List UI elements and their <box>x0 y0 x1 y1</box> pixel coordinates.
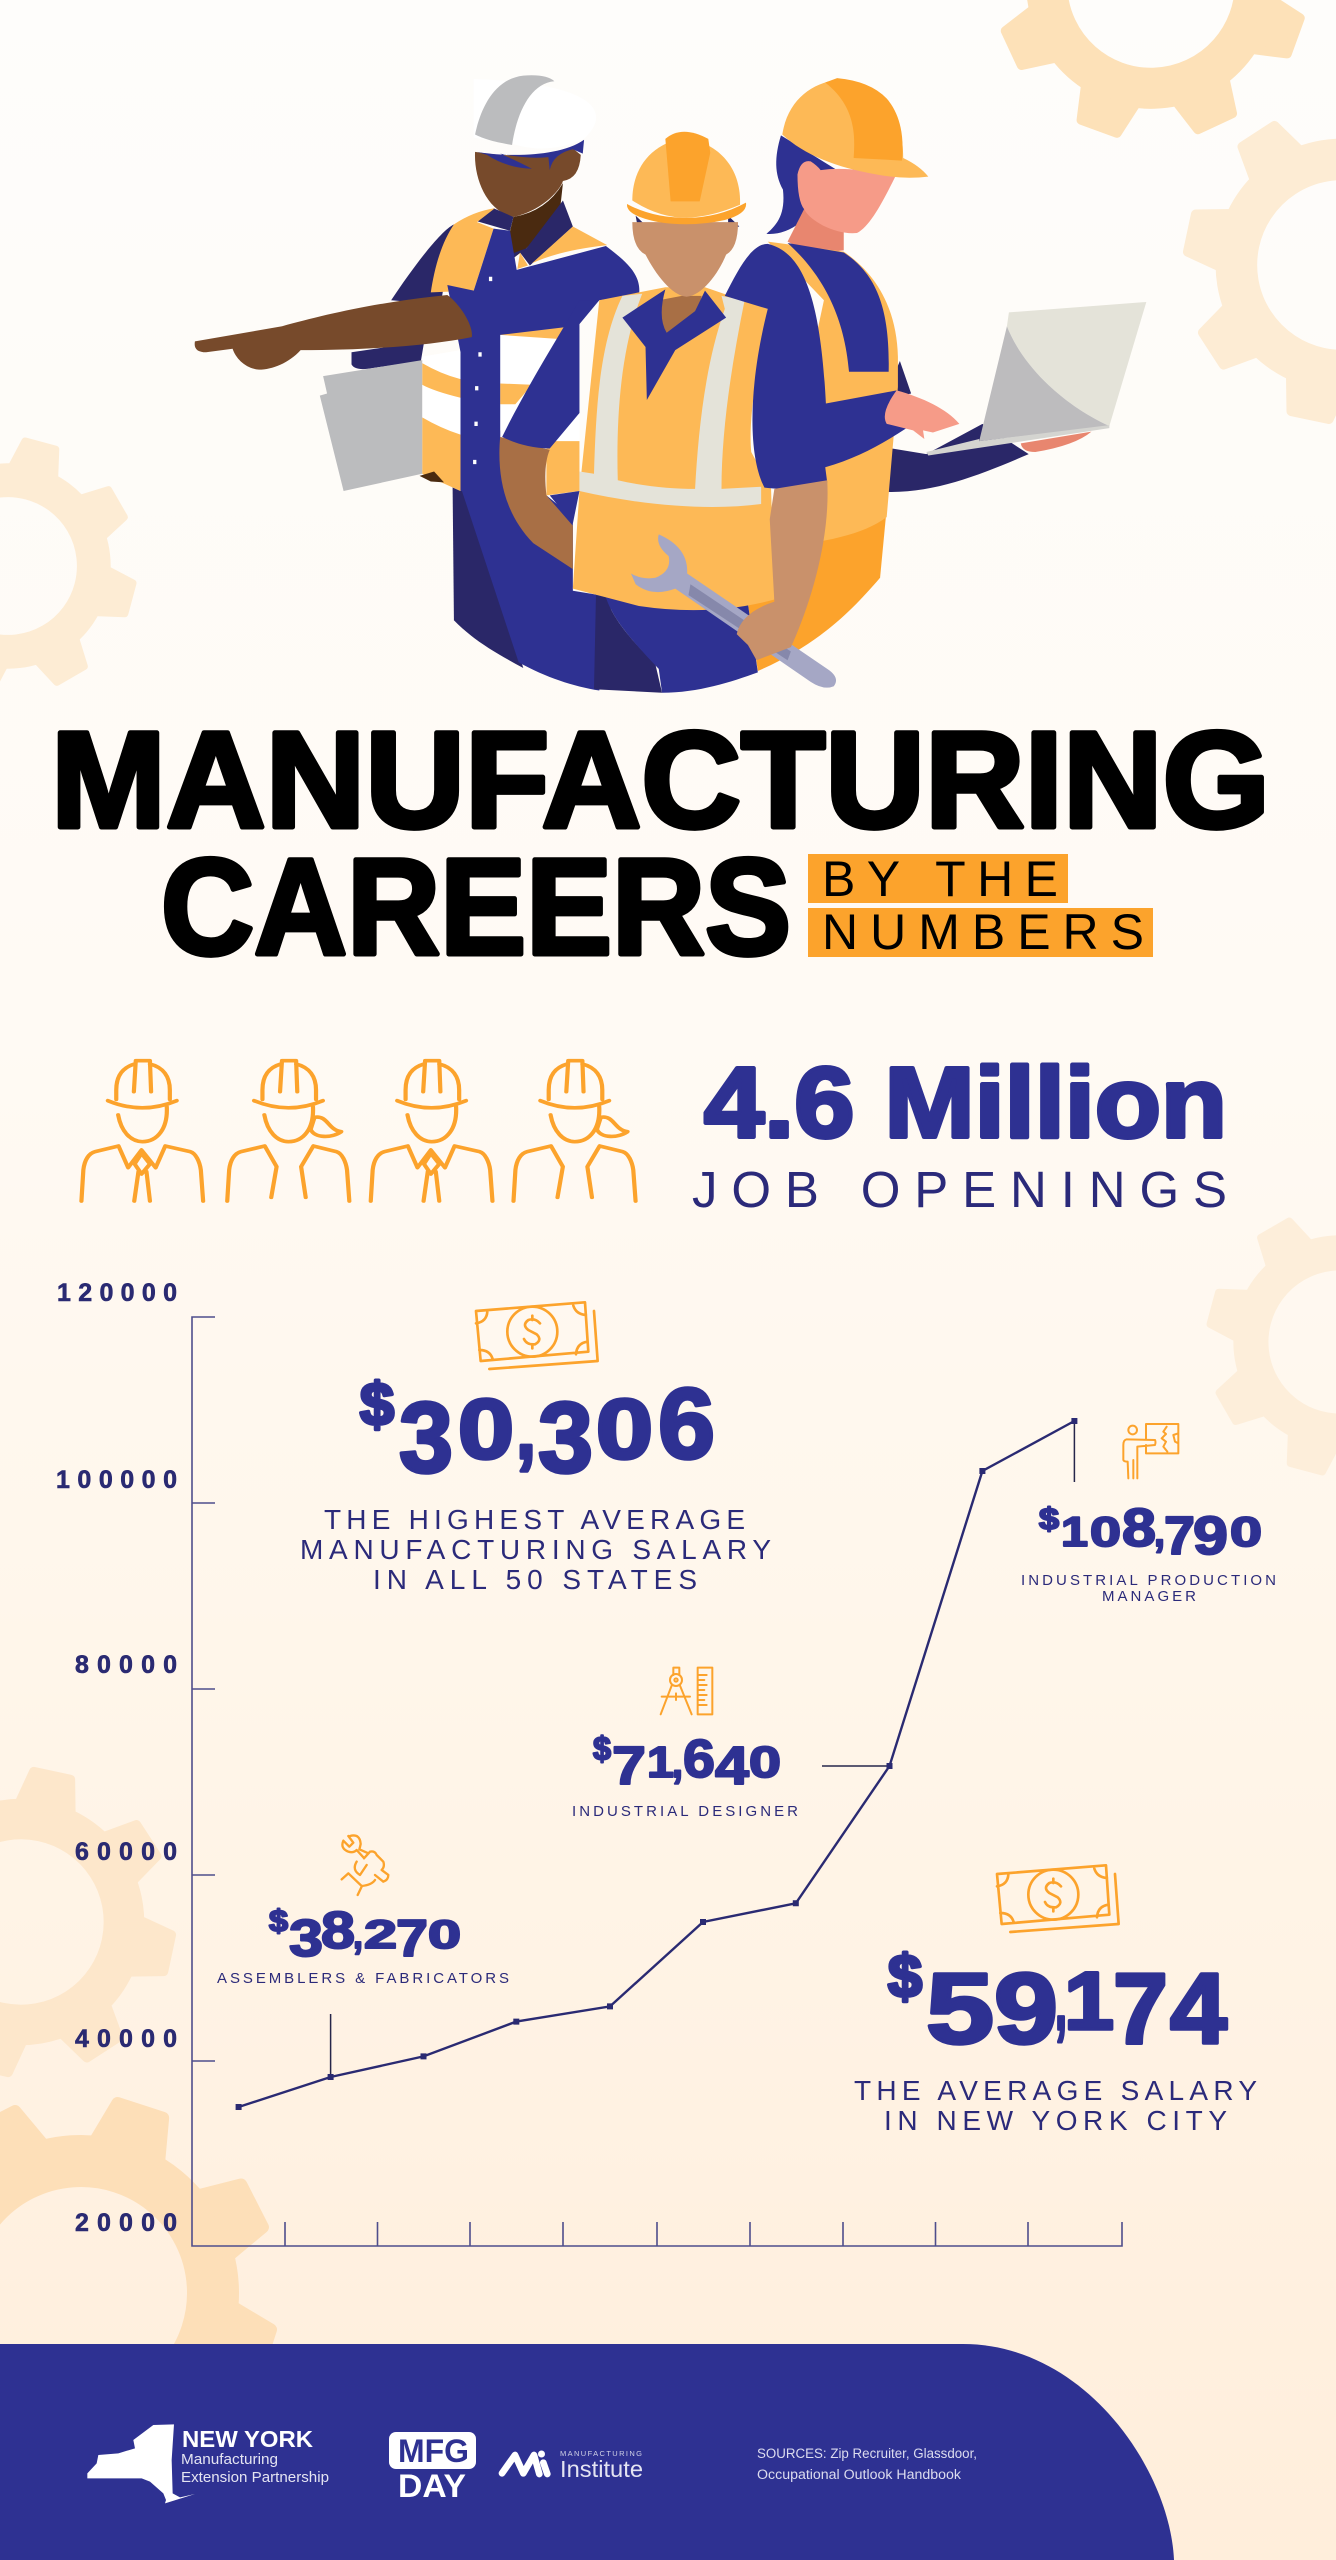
caption: average salary nyc: THE AVERAGE SALARY <box>854 2075 1257 2106</box>
stat: 38,270: 3 <box>289 1910 323 1968</box>
stat: 59,174: 1 <box>1064 1956 1114 2047</box>
y axis labels: 60000 <box>75 1838 177 1866</box>
gear: left upper <box>0 413 161 719</box>
logo: manufacturing institute <box>502 2449 643 2482</box>
stat: 30,306: , <box>516 1382 536 1476</box>
caption: highest average salary: MANUFACTURING SALARY <box>300 1534 771 1565</box>
stat: 71,640: 6 <box>683 1729 715 1789</box>
tag: numbers: NUMBERS <box>822 904 1144 960</box>
stat: 30,306: 6 <box>658 1368 715 1480</box>
logo: mfg day: MFG <box>398 2433 469 2469</box>
stat: 59,174: 9 <box>994 1953 1058 2065</box>
logo: mfg day: DAY <box>398 2468 466 2504</box>
stat: 108,790: , <box>1154 1508 1165 1555</box>
stat: 30,306: 3 <box>538 1382 593 1494</box>
logo: manufacturing institute: MANUFACTURING <box>560 2449 642 2458</box>
illustration: three workers <box>195 75 1146 693</box>
stat: 59,174: $ <box>888 1943 922 2010</box>
caption: industrial designer: INDUSTRIAL DESIGNER <box>572 1803 798 1820</box>
icon: man worker <box>371 1061 492 1201</box>
stat: 38,270: $ <box>269 1903 288 1938</box>
leader lines <box>331 1421 1074 2077</box>
stat: 38,270: 2 <box>364 1913 397 1957</box>
salary line <box>239 1421 1074 2107</box>
gear: left lower <box>0 1744 199 2100</box>
stat: 38,270: , <box>353 1913 363 1957</box>
tag: by the: BY THE <box>822 851 1058 907</box>
map: new york state <box>87 2424 195 2503</box>
y axis labels <box>56 1279 177 2237</box>
icons: four workers <box>81 1061 636 1201</box>
line chart <box>56 1279 1122 2246</box>
stat: 4.6 million: 4.6 Million <box>704 1047 1227 1159</box>
worker: centre, with wrench <box>499 132 959 693</box>
stat: 30,306: 0 <box>458 1382 514 1476</box>
caption: industrial production manager <box>1021 1572 1276 1605</box>
sources <box>757 2446 977 2482</box>
caption: industrial production manager: MANAGER <box>1102 1588 1196 1605</box>
stat: 71,640: , <box>672 1738 683 1787</box>
stat: 59,174: 4 <box>1170 1953 1227 2065</box>
icon: hand with wrench <box>342 1835 388 1895</box>
icon: presenter with board <box>1123 1424 1178 1478</box>
caption: highest average salary: IN ALL 50 STATES <box>373 1564 697 1595</box>
data points <box>236 1418 1077 2110</box>
stat: 38,270: 7 <box>396 1910 428 1968</box>
caption: average salary nyc: IN NEW YORK CITY <box>884 2105 1227 2136</box>
worker: right, with laptop <box>748 78 1146 671</box>
stat: 71,640: 4 <box>715 1736 749 1796</box>
stat: 59,174: 5 <box>926 1953 994 2065</box>
caption: assemblers and fabricators: ASSEMBLERS & FABRICATORS <box>217 1970 509 1987</box>
y axis labels: 100000 <box>56 1466 177 1494</box>
stat: 38,270: 8 <box>321 1902 355 1960</box>
stat: 59,174: , <box>1055 1956 1067 2047</box>
gear: bottom left <box>0 2051 323 2535</box>
stat: 30,306: $ <box>360 1371 394 1438</box>
stat: 71,640: $ <box>593 1730 611 1767</box>
icon: money top <box>476 1302 598 1369</box>
y axis labels: 20000 <box>75 2209 177 2237</box>
caption: industrial production manager: INDUSTRIAL PRODUCTION <box>1021 1572 1276 1589</box>
caption: highest average salary: THE HIGHEST AVERAGE <box>324 1504 745 1535</box>
y axis labels: 80000 <box>75 1651 177 1679</box>
gear: right upper <box>1160 83 1336 447</box>
stat: 108,790: 1 <box>1061 1508 1088 1555</box>
stat: 108,790: 8 <box>1122 1498 1156 1558</box>
y axis labels: 40000 <box>75 2025 177 2053</box>
icon: man worker <box>81 1061 203 1201</box>
logo: new york mep <box>87 2424 329 2503</box>
logo: manufacturing institute: Institute <box>560 2456 643 2482</box>
sources: SOURCES: Zip Recruiter, Glassdoor, <box>757 2446 977 2461</box>
stat: 71,640: 0 <box>749 1738 781 1787</box>
caption: highest average salary <box>300 1504 771 1595</box>
stat: 108,790: 7 <box>1164 1506 1195 1566</box>
stat: 108,790: 9 <box>1193 1506 1228 1566</box>
stat: 59,174: 7 <box>1113 1953 1168 2065</box>
icon: money lower <box>997 1865 1119 1932</box>
gear: right middle <box>1181 1183 1336 1501</box>
stat: 30,306: 0 <box>596 1382 653 1476</box>
stat: 71,640: 1 <box>647 1738 674 1787</box>
footer panel <box>0 2344 1174 2560</box>
icon: woman worker <box>513 1061 636 1201</box>
gear: top right <box>957 0 1336 178</box>
stat: 108,790: 0 <box>1090 1508 1121 1555</box>
label: job openings: JOB OPENINGS <box>692 1161 1227 1218</box>
sources: Occupational Outlook Handbook <box>757 2467 961 2482</box>
stat: 108,790: 0 <box>1230 1508 1262 1555</box>
logo text: new york: NEW YORK <box>182 2426 313 2452</box>
worker: left, pointing <box>195 75 639 691</box>
y axis labels: 120000 <box>57 1279 177 1307</box>
chart axes <box>192 1317 1122 2246</box>
title line: careers: CAREERS <box>161 831 791 984</box>
logo: mfg day <box>389 2432 476 2504</box>
caption: average salary nyc <box>854 2075 1257 2136</box>
stat: 30,306: 3 <box>399 1382 453 1494</box>
icon: compass and ruler <box>661 1668 712 1714</box>
title line: manufacturing: MANUFACTURING <box>51 704 1270 857</box>
logo text: mep line one: Manufacturing <box>181 2451 278 2468</box>
icon: woman worker <box>227 1061 349 1201</box>
stat: 71,640: 7 <box>612 1736 646 1796</box>
stat: 38,270: 0 <box>428 1913 461 1957</box>
title <box>51 704 1270 984</box>
logo text: mep line two: Extension Partnership <box>181 2469 329 2486</box>
stat: 108,790: $ <box>1039 1501 1059 1536</box>
